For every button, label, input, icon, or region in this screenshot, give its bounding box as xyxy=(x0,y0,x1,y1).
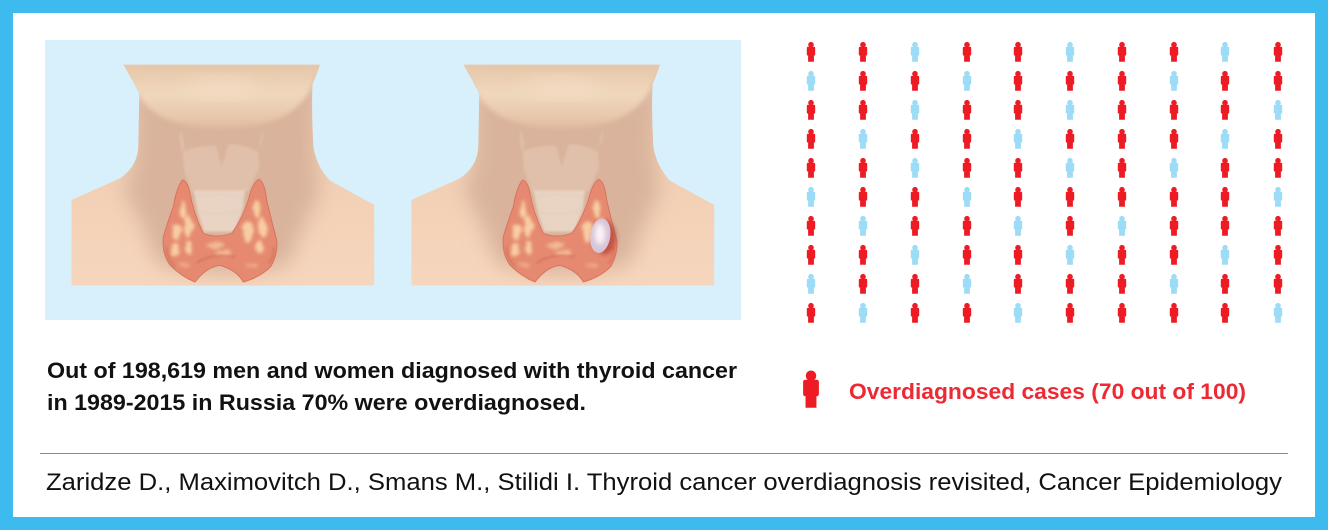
text block: finding summary: Out of 198,619 men and women diagnosed with thyroid cancer xyxy=(47,358,737,383)
legend label: Overdiagnosed cases (70 out of 100) xyxy=(849,379,1246,404)
text block: finding summary xyxy=(47,358,737,415)
row 9 xyxy=(807,274,1282,294)
row 3 xyxy=(807,100,1282,120)
row 6 xyxy=(807,187,1282,207)
illustration: thyroid with nodule xyxy=(400,50,730,300)
row 5 xyxy=(807,158,1282,178)
pictogram grid: 100 people xyxy=(807,42,1282,323)
row 4 xyxy=(807,129,1282,149)
legend: overdiagnosed cases xyxy=(803,371,1246,408)
row 10 xyxy=(807,303,1282,323)
row 1 xyxy=(807,42,1282,62)
illustration: healthy thyroid xyxy=(60,50,390,300)
text block: finding summary: in 1989-2015 in Russia 70% were overdiagnosed. xyxy=(47,390,586,415)
row 2 xyxy=(807,71,1282,91)
icon: red person xyxy=(803,371,819,408)
row 7 xyxy=(807,216,1282,236)
panel: thyroid illustrations xyxy=(45,40,741,320)
row 8 xyxy=(807,245,1282,265)
citation: Zaridze D., Maximovitch D., Smans M., Stilidi I. Thyroid cancer overdiagnosis revisited, Cancer Epidemiology xyxy=(46,469,1282,496)
